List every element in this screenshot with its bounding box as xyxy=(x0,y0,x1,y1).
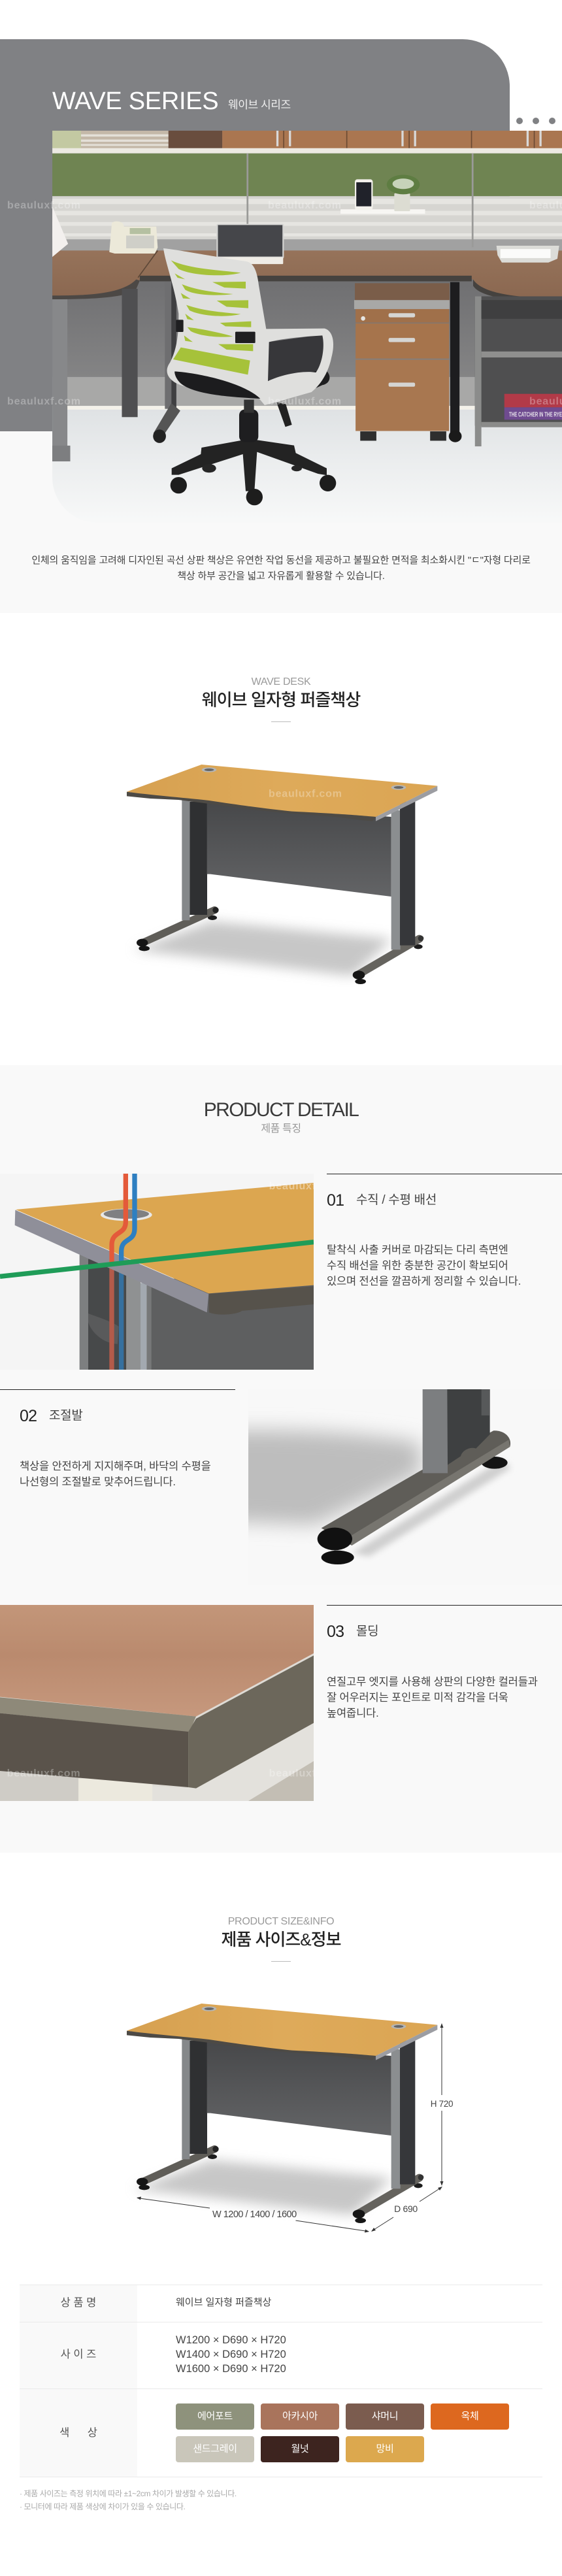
text 02: 나선형의 조절발로 맞추어드립니다. xyxy=(20,1476,176,1488)
value: sizes: W1400 × D690 × H720 xyxy=(176,2349,286,2360)
desk tops xyxy=(52,250,562,300)
swatch: mangbi xyxy=(346,2436,424,2462)
tray xyxy=(497,246,559,263)
posts xyxy=(246,154,248,225)
wall shelf, smartphone and plant xyxy=(340,209,425,214)
number 03: 03 xyxy=(327,1623,344,1641)
text 01: 있으며 전선을 깔끔하게 정리할 수 있습니다. xyxy=(327,1276,521,1287)
black leg xyxy=(450,282,459,436)
arm pads xyxy=(235,332,256,343)
front edge xyxy=(208,1286,314,1315)
color swatches xyxy=(176,2403,509,2462)
right shelf unit xyxy=(475,296,562,425)
green cable xyxy=(0,1242,314,1276)
text 02 xyxy=(20,1461,211,1488)
hero photo: office workstation with chair xyxy=(52,131,562,506)
leg xyxy=(80,1255,90,1370)
seat cushion xyxy=(312,371,329,388)
heading 03: 몰딩 xyxy=(356,1625,378,1638)
value: sizes: W1200 × D690 × H720 xyxy=(176,2334,286,2346)
text 03: 높여줍니다. xyxy=(327,1708,379,1719)
label: W size: W 1200 / 1400 / 1600 xyxy=(212,2209,297,2220)
white slat panel xyxy=(52,196,562,241)
text 03 xyxy=(327,1676,538,1719)
hero photo: office workstation with chair: beauluxf.com xyxy=(268,396,342,407)
swatch: orange xyxy=(431,2403,509,2430)
label: product name: 상 품 명 xyxy=(61,2297,96,2309)
text 03: 잘 어우러지는 포인트로 미적 감각을 더욱 xyxy=(327,1692,508,1704)
swatch: airport: 에어포트 xyxy=(197,2411,233,2422)
chair arm hole backing xyxy=(268,335,323,382)
floor xyxy=(52,409,562,490)
paper stack xyxy=(52,206,68,257)
green fabric screen xyxy=(52,154,562,196)
section subtitle: features: 제품 특징 xyxy=(261,1123,301,1134)
value: sizes: W1600 × D690 × H720 xyxy=(176,2363,286,2375)
foot cap xyxy=(318,1528,352,1550)
label: D 690: D 690 xyxy=(394,2204,418,2214)
section title: size info: 제품 사이즈&정보 xyxy=(221,1930,341,1949)
swatch: walnut: 월넛 xyxy=(291,2443,308,2454)
product image: desk with dimensions xyxy=(127,2004,438,2223)
chair base xyxy=(172,439,327,491)
top cabinets xyxy=(52,131,81,148)
icon: three dots xyxy=(516,118,555,124)
watermark: beauluxf.com xyxy=(269,788,342,799)
column xyxy=(423,1389,448,1473)
foot shadow xyxy=(352,1459,511,1557)
text 01 xyxy=(327,1244,521,1287)
swatch: shamuni xyxy=(346,2403,424,2430)
panel: hero gray backdrop xyxy=(0,39,510,431)
text 02: 책상을 안전하게 지지해주며, 바닥의 수평을 xyxy=(20,1461,211,1472)
swatch: acacia xyxy=(261,2403,339,2430)
heading 01: 수직 / 수평 배선 xyxy=(356,1193,437,1207)
section heading: product detail: PRODUCT DETAIL xyxy=(204,1099,358,1121)
chair xyxy=(163,248,336,505)
swatch: shamuni: 샤머니 xyxy=(372,2411,398,2422)
intro text: 책상 하부 공간을 넓고 자유롭게 활용할 수 있습니다. xyxy=(177,570,385,582)
heading 02: 조절발 xyxy=(49,1409,83,1423)
rear glide xyxy=(482,1457,508,1469)
wall under desk xyxy=(67,280,493,333)
subtitle: Korean series name: 웨이브 시리즈 xyxy=(228,99,291,111)
label: color: 색 상 xyxy=(59,2427,97,2439)
number 02: 02 xyxy=(20,1407,37,1425)
watermark on gray left of hero xyxy=(7,200,52,407)
label: H 720: H 720 xyxy=(431,2099,453,2109)
detail image 03: molding: beauluxf.com xyxy=(7,1768,80,1779)
footnotes: · 제품 사이즈는 측정 위치에 따라 ±1~2cm 차이가 발생할 수 있습니다. xyxy=(20,2489,237,2498)
red and blue cables xyxy=(112,1174,125,1263)
number 01: 01 xyxy=(327,1191,344,1210)
dimension arrows xyxy=(137,2023,443,2232)
text 03: 연질고무 엣지를 사용해 상판의 다양한 컬러들과 xyxy=(327,1676,538,1688)
footnotes: · 모니터에 따라 제품 색상에 차이가 있을 수 있습니다. xyxy=(20,2502,185,2511)
label: size: 사 이 즈 xyxy=(61,2349,96,2360)
phone on desk xyxy=(109,222,157,254)
swatch: sand gray: 샌드그레이 xyxy=(193,2443,237,2454)
detail image 03: molding xyxy=(0,1605,314,1801)
background band: product detail xyxy=(0,1065,562,1853)
rule 03 xyxy=(327,1605,562,1606)
detail image 01: cable routing xyxy=(0,1174,314,1370)
spec table xyxy=(20,2285,542,2477)
rule 02 xyxy=(0,1389,235,1390)
product image: desk xyxy=(127,765,438,984)
top xyxy=(16,1183,314,1293)
detail image 02: adjustable foot xyxy=(248,1389,511,1564)
white chair frame xyxy=(163,248,333,405)
section heading: wave desk: WAVE DESK xyxy=(252,676,310,687)
swatch: sand gray xyxy=(176,2436,254,2462)
title: WAVE SERIES: WAVE SERIES xyxy=(52,88,218,115)
side edge xyxy=(15,1210,208,1312)
text 01: 탈착식 사출 커버로 마감되는 다리 측면엔 xyxy=(327,1244,508,1256)
green mesh bands xyxy=(171,260,253,374)
swatch: airport xyxy=(176,2403,254,2430)
value: sizes xyxy=(176,2334,286,2375)
submerged cables xyxy=(105,1257,119,1370)
swatch: walnut xyxy=(261,2436,339,2462)
left legs xyxy=(52,299,67,461)
divider xyxy=(271,1961,291,1962)
swatch: orange: 옥체 xyxy=(461,2411,478,2422)
foot bar xyxy=(322,1430,510,1545)
swatch: acacia: 아카시아 xyxy=(282,2411,318,2422)
intro text xyxy=(31,555,531,582)
grommet xyxy=(101,1209,152,1221)
pedestal drawers xyxy=(355,283,450,303)
section title: wave desk: 웨이브 일자형 퍼즐책상 xyxy=(202,690,360,710)
background band: hero lower xyxy=(0,431,562,613)
hero photo: office workstation with chair: beauluxf.com xyxy=(268,200,342,211)
laptop xyxy=(216,224,284,258)
footnotes xyxy=(20,2489,237,2511)
swatch: mangbi: 망비 xyxy=(376,2443,393,2454)
text 01: 수직 배선을 위한 충분한 공간이 확보되어 xyxy=(327,1260,508,1272)
section heading: size info: PRODUCT SIZE&INFO xyxy=(228,1916,334,1927)
panel under desk xyxy=(150,1279,314,1370)
value: product name: 웨이브 일자형 퍼즐책상 xyxy=(176,2297,271,2308)
label column xyxy=(20,2285,137,2477)
divider xyxy=(271,721,291,722)
intro text: 인체의 움직임을 고려해 디자인된 곡선 상판 책상은 유연한 작업 동선을 제공하고 불필요한 면적을 최소화시킨 "ㄷ"자형 다리로 xyxy=(31,555,531,566)
